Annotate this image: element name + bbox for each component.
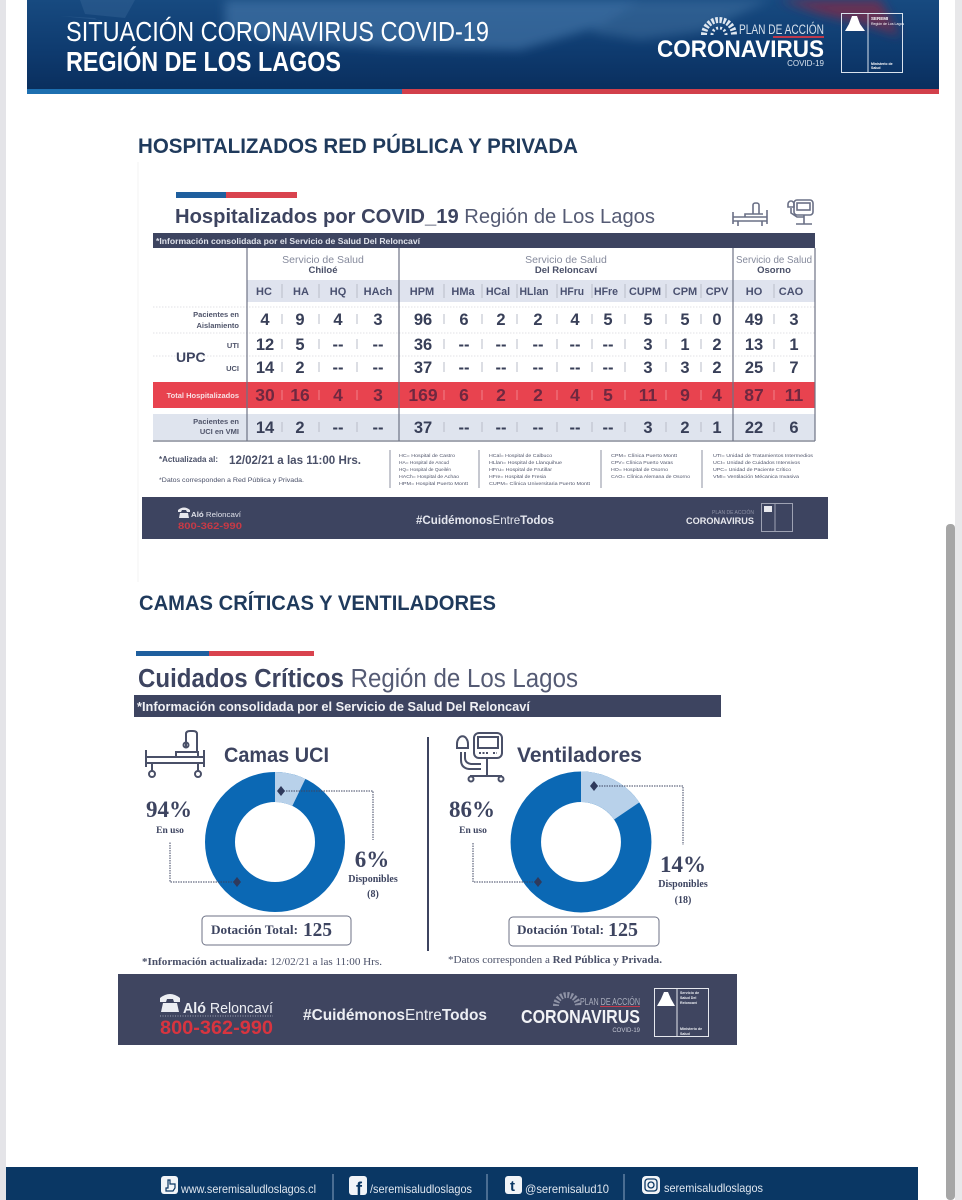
header logo: plan de acción coronavirus: CORONAVIRUS [657,36,824,63]
footer logo: coronavirus [521,995,641,1034]
column headers: HLlan [520,286,549,298]
info bar: *Información consolidada por el Servicio de Salud Del Reloncaví [156,237,421,246]
table footer band: 800-362-990 [178,521,242,532]
row: pacientes en aislamiento: 5 [680,311,690,329]
footer logo: shield: Ministerio de [680,1027,702,1031]
service headers: Osorno [757,265,791,276]
header stripe [27,89,939,94]
row: UTI: 1 [789,336,799,354]
column headers: HO [746,286,763,298]
panel title: Cuidados Críticos Región de Los Lagos [138,665,578,693]
row: total hospitalizados: 2 [533,385,543,405]
abbreviations legend: HC= Hospital de Castro [399,453,455,458]
icon: hospital bed small [733,203,767,226]
update note: *Datos corresponden a Red Pública y Privada. [159,477,304,484]
link: instagram: seremisaludloslagos [664,1181,763,1195]
label: 6% disponibles: 6% [355,847,389,872]
total box [509,917,659,946]
header logo: seremi shield: Salud [871,66,881,70]
row: total hospitalizados: 3 [373,385,383,405]
header logo: seremi shield: Región de Los Lagos [871,22,904,26]
abbreviations legend: CAO= Clínica Alemana de Osorno [611,474,690,479]
chart: ventiladores [448,733,708,966]
abbreviations legend: UPC= Unidad de Paciente Crítico [713,467,791,472]
row: UCI: -- [332,359,344,377]
row: pacientes en aislamiento: 2 [496,311,506,329]
row labels: Pacientes en [193,417,239,426]
row: UTI: 12 [256,336,274,354]
link: website [161,1176,316,1196]
row: pacientes en UCI en VMI: 14 [256,419,275,437]
row: UTI: 2 [712,336,722,354]
abbreviations legend [390,450,814,488]
icon: phone [160,994,180,1012]
info bar: *Información consolidada por el Servicio de Salud Del Reloncaví [137,699,530,714]
icon: hospital bed [146,731,204,777]
row: total hospitalizados: 6 [459,385,469,405]
row labels: Pacientes en [193,310,239,319]
link: facebook: f [356,1179,363,1199]
row: pacientes en aislamiento: 4 [260,311,270,329]
footer logo: coronavirus: PLAN DE ACCIÓN [580,995,640,1008]
row: UTI: -- [570,336,580,354]
row: UCI: 37 [414,359,432,377]
column headers: CPV [706,286,729,298]
service headers: Servicio de Salud [525,254,607,266]
row: UCI: 25 [745,359,763,377]
icon: ventilator small [788,200,813,224]
label: 86% en uso [449,797,495,836]
table rules [153,248,815,441]
row: pacientes en aislamiento: 9 [295,311,305,329]
footer logo: shield [654,988,708,1036]
abbreviations legend: CPV= Clínica Puerto Varas [611,460,674,465]
abbreviations legend: HO= Hospital de Osorno [611,467,668,472]
label: 14% disponibles [658,852,708,906]
row: UTI: -- [372,336,384,354]
connector: en uso [170,842,241,887]
column headers: CUPM [629,286,661,298]
row labels [167,310,239,436]
row: UCI: -- [372,359,384,377]
update note: 12/02/21 a las 11:00 Hrs. [229,455,361,467]
row: total hospitalizados: 169 [408,385,438,405]
abbreviations legend: HFru= Hospital de Frutillar [489,467,552,472]
abbreviations legend: HA= Hospital de Ancud [399,460,449,465]
header title: REGIÓN DE LOS LAGOS [66,46,341,77]
header banner [27,0,939,94]
chart title: Camas UCI [224,744,329,767]
table footer band: CORONAVIRUS [686,516,754,527]
row: total hospitalizados [255,385,804,405]
data note: *Datos corresponden a Red Pública y Privada. [448,955,663,966]
row: UTI: -- [532,336,544,354]
row: pacientes en aislamiento: 5 [603,311,613,329]
abbreviations legend: HFre= Hospital de Fresia [489,474,546,479]
column headers: HC [256,286,272,298]
row: UCI [256,359,799,377]
row: UCI: -- [532,359,544,377]
footer logo: coronavirus: CORONAVIRUS [521,1007,640,1027]
row: pacientes en aislamiento: 96 [414,311,432,329]
row: pacientes en UCI en VMI: 2 [680,419,690,437]
page footer: social links [6,1167,918,1200]
link: website: www.seremisaludloslagos.cl [180,1182,316,1196]
panel: cuidados críticos [6,651,918,1200]
column headers: HPM [410,286,434,298]
header title [66,16,489,77]
header logo: seremi shield: Ministerio de [871,62,893,66]
service headers [282,254,812,276]
column headers: HAch [364,286,393,298]
row: pacientes en UCI en VMI: 2 [295,419,305,437]
chart: camas UCI [142,731,398,968]
label: 94% en uso: En uso [156,826,184,836]
row: UCI: -- [496,359,506,377]
row: UCI: 14 [256,359,275,377]
icon: ventilator [457,733,504,782]
row: UCI: 3 [680,359,690,377]
column headers: HMa [451,286,475,298]
row: UCI: -- [602,359,614,377]
row: pacientes en aislamiento: 4 [333,311,343,329]
row: UCI: -- [570,359,580,377]
row: total hospitalizados: 4 [333,385,343,405]
panel footer band: 800-362-990 [160,1018,273,1039]
label: 14% disponibles: 14% [660,852,706,877]
row: total hospitalizados: 87 [744,385,764,405]
table footer band: PLAN DE ACCIÓN [712,509,754,516]
label: 94% en uso: 94% [146,797,192,822]
row: pacientes en UCI en VMI: -- [458,419,470,437]
label: 14% disponibles: Disponibles [658,879,708,890]
row: pacientes en UCI en VMI: 22 [745,419,763,437]
donut: 86 / 14 [526,772,639,897]
row: pacientes en UCI en VMI: 6 [789,419,799,437]
row: pacientes en aislamiento: 4 [570,311,580,329]
row labels: UTI [227,341,239,350]
row: UCI: -- [458,359,470,377]
row: UCI: 2 [295,359,305,377]
label: 86% en uso: En uso [459,826,487,836]
panel accent bar [136,651,314,656]
column headers: HA [293,286,309,298]
row: UTI [256,336,799,354]
link: instagram [642,1176,763,1195]
connector: disponibles [277,786,373,840]
row: UCI: 3 [643,359,653,377]
header logo: plan de acción coronavirus [657,20,825,68]
row: pacientes en UCI en VMI: -- [332,419,344,437]
row: pacientes en UCI en VMI: 1 [712,419,722,437]
abbreviations legend: CPM= Clínica Puerto Montt [611,453,678,458]
row labels: Total Hospitalizados [167,391,239,400]
label: 14% disponibles: (18) [675,895,691,906]
column headers: HFre [594,286,618,298]
panel accent bar [176,192,297,198]
connector: disponibles [590,781,683,845]
row: pacientes en UCI en VMI: -- [372,419,384,437]
update note: *Información actualizada: 12/02/21 a las 11:00 Hrs. [142,957,382,968]
row: total hospitalizados: 2 [496,385,506,405]
row: total hospitalizados: 16 [290,385,310,405]
table title: Hospitalizados por COVID_19 Región de Los Lagos [175,205,655,228]
row: total hospitalizados: 11 [639,385,658,405]
row: total hospitalizados: 4 [712,385,722,405]
column headers: CPM [673,286,697,298]
abbreviations legend: VMI= Ventilación Mécanica Invasiva [713,474,799,479]
row: UTI: -- [458,336,470,354]
link: facebook [349,1176,472,1199]
row labels: UCI en VMI [200,427,239,436]
row: total hospitalizados: 11 [785,385,804,405]
gray vmi row band [153,414,815,440]
header logo: seremi shield [842,13,904,72]
row labels: UPC [176,349,206,365]
column headers: HCal [486,286,510,298]
abbreviations legend: HPM= Hospital Puerto Montt [399,481,469,486]
row: pacientes en UCI en VMI: -- [496,419,506,437]
red total row band [153,382,815,408]
row: pacientes en aislamiento: 49 [745,311,763,329]
abbreviations legend: HACh= Hospital de Achao [399,474,459,479]
service headers: Servicio de Salud [282,254,364,266]
footer logo: shield: Reloncaví [680,1001,698,1005]
abbreviations legend: CUPM= Clínica Universitaria Puerto Montt [489,481,591,486]
footer logo: coronavirus: COVID-19 [612,1028,641,1034]
row: total hospitalizados: 5 [603,385,613,405]
update note: *Actualizada al: [159,455,218,464]
chart title: Ventiladores [517,744,642,767]
row: pacientes en aislamiento: 2 [533,311,543,329]
footer logo: shield: Servicio de [680,991,699,995]
footer logo: shield: Salud Del [680,996,696,1000]
row: UCI: 7 [789,359,799,377]
heading: camas críticas: CAMAS CRÍTICAS Y VENTILADORES [139,592,496,615]
row: pacientes en UCI en VMI [256,419,799,437]
abbreviations legend: HCal= Hospital de Calbuco [489,453,552,458]
panel: hospitalizados table [142,192,828,539]
total box: Dotación Total: [211,923,298,937]
link: tumblr: t [510,1178,515,1195]
header logo: seremi shield: SEREMI [871,16,888,21]
row: UCI: 2 [712,359,722,377]
label: 6% disponibles: Disponibles [348,874,398,885]
total box: 125 [608,919,638,941]
header logo: plan de acción coronavirus: PLAN DE ACCIÓN [739,22,824,37]
row: UTI: -- [332,336,344,354]
service headers: Del Reloncaví [535,265,598,276]
table footer band [142,497,828,539]
row: total hospitalizados: 30 [255,385,275,405]
total box: Dotación Total: [517,923,604,937]
row: pacientes en UCI en VMI: -- [532,419,544,437]
row: pacientes en UCI en VMI: -- [602,419,614,437]
row: UTI: 3 [643,336,653,354]
panel footer band [118,974,737,1045]
header title: SITUACIÓN CORONAVIRUS COVID-19 [66,16,489,47]
row: UTI: -- [496,336,506,354]
scrollbar [946,524,955,1200]
service headers: Servicio de Salud [736,255,812,266]
row: total hospitalizados: 9 [680,385,690,405]
connector: en uso [473,843,542,887]
table footer band: Aló Reloncaví [191,510,242,519]
abbreviations legend: UTI= Unidad de Tratamientos Intermedios [713,453,814,458]
total box [202,916,351,945]
label: 94% en uso [146,797,192,836]
label: 6% disponibles: (8) [367,889,379,900]
info bar [134,695,721,717]
link: facebook: /seremisaludloslagos [370,1182,472,1196]
column header band [247,280,815,302]
panel footer band: #CuidémonosEntreTodos [303,1007,487,1024]
column headers: HQ [330,286,347,298]
abbreviations legend: HQ= Hospital de Queilén [399,467,451,472]
center divider [427,737,429,951]
row labels: Aislamiento [196,321,239,330]
column headers: HFru [560,286,584,298]
donut: 94 / 6 [220,772,330,897]
panel footer band: Aló Reloncaví [183,1000,274,1017]
row: UTI: -- [602,336,614,354]
link: tumblr [505,1176,609,1196]
row: total hospitalizados: 4 [570,385,580,405]
row: UTI: 1 [680,336,690,354]
row: UTI: 36 [414,336,432,354]
row: UTI: 13 [745,336,763,354]
row: pacientes en aislamiento: 6 [459,311,469,329]
row: pacientes en aislamiento [260,311,799,329]
column headers [256,286,804,298]
label: 6% disponibles [348,847,398,900]
total box: 125 [303,919,332,941]
row: pacientes en aislamiento: 3 [789,311,799,329]
row: pacientes en UCI en VMI: 37 [414,419,432,437]
row: pacientes en aislamiento: 3 [373,311,383,329]
abbreviations legend: UCI= Unidad de Cuidados Intensivos [713,460,801,465]
heading: hospitalizados: HOSPITALIZADOS RED PÚBLICA Y PRIVADA [138,134,578,158]
row: pacientes en aislamiento: 0 [712,311,722,329]
label: 86% en uso: 86% [449,797,495,822]
header logo: plan de acción coronavirus: COVID-19 [787,59,825,68]
row: pacientes en aislamiento: 5 [643,311,653,329]
row: pacientes en UCI en VMI: -- [570,419,580,437]
abbreviations legend: HLlan= Hospital de Llanquihue [489,460,562,465]
footer logo: shield: Salud [680,1032,690,1036]
update note [159,455,361,484]
service headers: Chiloé [308,265,338,276]
info bar [153,233,815,248]
link: tumblr: @seremisalud10 [525,1182,609,1196]
row: pacientes en UCI en VMI: 3 [643,419,653,437]
column separators [282,284,774,432]
column headers: CAO [779,286,804,298]
row labels: UCI [226,364,239,373]
table footer band: #CuidémonosEntreTodos [416,515,554,527]
row: UTI: 5 [295,336,305,354]
